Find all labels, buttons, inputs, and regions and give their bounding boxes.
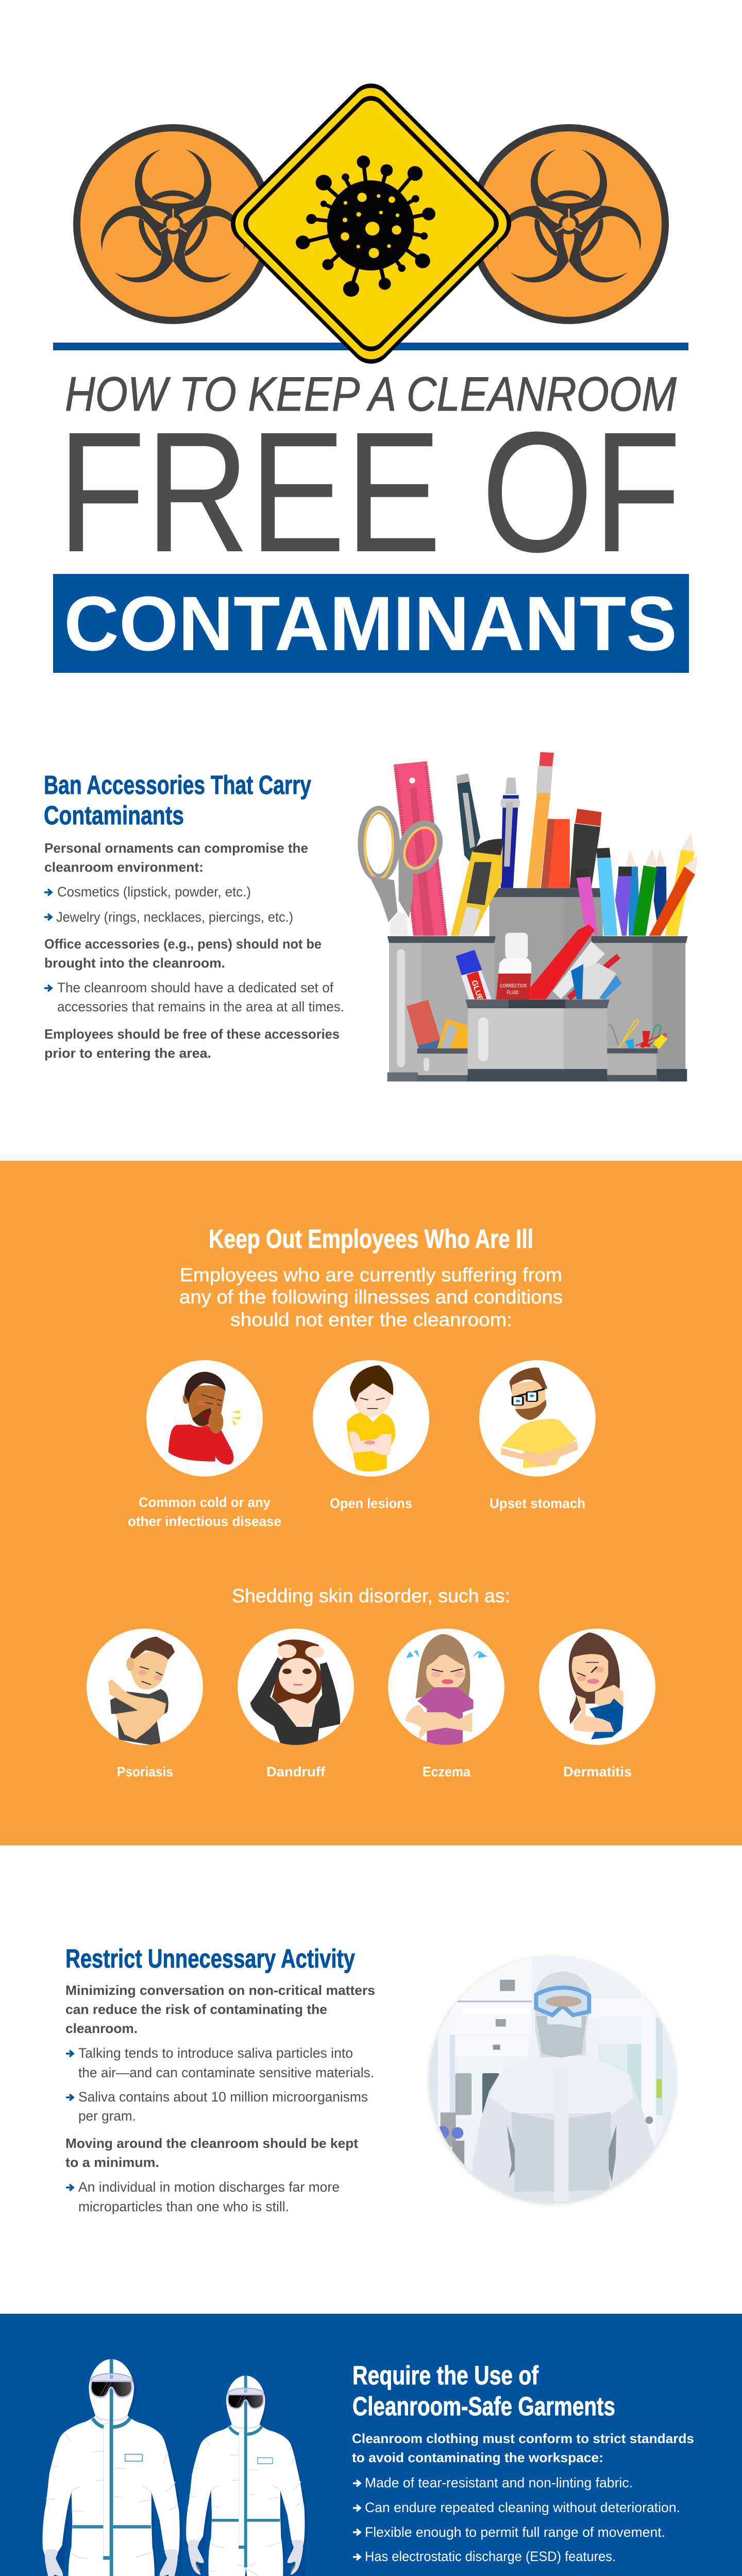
text block: accessories guidance: Personal ornaments can compromise the: [44, 840, 308, 856]
intro text: any of the following illnesses and conditions: [179, 1286, 563, 1308]
photo: worker in cleanroom suit: [428, 1955, 679, 2206]
text block: garment guidance: [352, 2431, 694, 2576]
panel: restrict unnecessary activity: [65, 1944, 679, 2214]
illustration: small figure in cleanroom suit: [186, 2376, 307, 2576]
label: dermatitis: Dermatitis: [563, 1764, 632, 1780]
text block: accessories guidance: Jewelry (rings, necklaces, piercings, etc.): [56, 909, 293, 925]
heading: Ban Accessories That Carry: [44, 770, 311, 800]
text block: activity guidance: microparticles than one who is still.: [78, 2199, 289, 2214]
text block: activity guidance: per gram.: [78, 2108, 136, 2124]
text block: activity guidance: Saliva contains about 10 million microorganisms: [78, 2089, 368, 2105]
icon: man coughing: [146, 1360, 263, 1477]
icon: man with psoriasis: [87, 1629, 203, 1747]
label: common cold: Common cold or any: [139, 1495, 271, 1510]
accent line: [53, 343, 688, 350]
text block: accessories guidance: cleanroom environment:: [44, 859, 204, 875]
intro text: should not enter the cleanroom:: [230, 1309, 512, 1330]
intro text: [179, 1264, 563, 1330]
icon: woman with dermatitis: [539, 1629, 655, 1745]
label: dandruff: Dandruff: [266, 1764, 326, 1780]
icon: yellow diamond warning sign: [223, 75, 519, 372]
icon: right biohazard badge: [473, 128, 665, 320]
icon: virus: [296, 156, 435, 297]
label: open lesions: Open lesions: [330, 1496, 412, 1511]
text block: garment guidance: Made of tear-resistant and non-linting fabric.: [365, 2475, 633, 2490]
text block: accessories guidance: Employees should be free of these accessories: [44, 1026, 340, 1042]
text block: garment guidance: to avoid contaminating the workspace:: [352, 2450, 603, 2465]
label: common cold: [128, 1495, 281, 1529]
icon: desk organizer with office accessories: FLUID: [507, 989, 519, 995]
icon: left biohazard badge: [77, 128, 269, 320]
icon: desk organizer with office accessories: [362, 752, 698, 1081]
text block: accessories guidance: accessories that remains in the area at all times.: [57, 999, 344, 1014]
text block: activity guidance: the air—and can contaminate sensitive materials.: [78, 2065, 374, 2080]
text block: garment guidance: Cleanroom clothing must conform to strict standards: [352, 2431, 694, 2446]
label: common cold: other infectious disease: [128, 1514, 281, 1529]
title: [53, 367, 689, 673]
text block: activity guidance: Moving around the cleanroom should be kept: [65, 2136, 358, 2151]
icon: person with open lesions: [313, 1360, 429, 1477]
header illustration: biohazard signs and virus warning sign: [53, 75, 688, 372]
heading: Require the Use of: [352, 2361, 539, 2390]
heading: [352, 2361, 615, 2421]
text block: activity guidance: can reduce the risk of contaminating the: [65, 2002, 327, 2017]
label: upset stomach: Upset stomach: [490, 1496, 585, 1511]
text block: activity guidance: An individual in motion discharges far more: [78, 2179, 340, 2195]
text block: activity guidance: Minimizing conversation on non-critical matters: [65, 1982, 375, 1998]
icon: desk organizer with office accessories: GLUE ST: [469, 979, 488, 1013]
text block: activity guidance: cleanroom.: [65, 2021, 138, 2036]
text block: garment guidance: Can endure repeated cleaning without deterioration.: [365, 2500, 680, 2515]
icon: man with upset stomach: [479, 1360, 596, 1477]
text block: activity guidance: to a minimum.: [65, 2155, 159, 2170]
text block: garment guidance: Has electrostatic discharge (ESD) features.: [365, 2549, 616, 2564]
panel: cleanroom-safe garments: [0, 2314, 742, 2576]
heading: Restrict Unnecessary Activity: [65, 1944, 355, 1973]
illustration: large figure in cleanroom suit: [43, 2359, 182, 2576]
text block: accessories guidance: Cosmetics (lipstick, powder, etc.): [57, 884, 251, 900]
icon: woman with eczema: [388, 1629, 504, 1745]
text block: activity guidance: [65, 1982, 375, 2214]
title banner: contaminants: CONTAMINANTS: [64, 580, 677, 667]
text block: accessories guidance: Office accessories (e.g., pens) should not be: [44, 936, 322, 952]
subheading: shedding skin disorder: Shedding skin disorder, such as:: [232, 1585, 510, 1606]
heading: [44, 770, 311, 830]
heading: Cleanroom-Safe Garments: [352, 2392, 615, 2421]
panel: keep out employees who are ill: [0, 1161, 742, 1845]
text block: accessories guidance: prior to entering the area.: [44, 1045, 211, 1061]
text block: accessories guidance: [44, 840, 344, 1061]
heading: Contaminants: [44, 801, 184, 830]
text block: accessories guidance: brought into the cleanroom.: [44, 955, 225, 971]
label: psoriasis: Psoriasis: [117, 1764, 173, 1780]
icon: woman with dandruff: [238, 1629, 354, 1745]
heading: Keep Out Employees Who Are Ill: [209, 1224, 533, 1253]
text block: garment guidance: Flexible enough to permit full range of movement.: [365, 2524, 665, 2540]
icon: desk organizer with office accessories: CORRECTION: [500, 983, 527, 989]
text block: activity guidance: Talking tends to introduce saliva particles into: [78, 2045, 353, 2061]
text block: accessories guidance: The cleanroom should have a dedicated set of: [57, 980, 333, 995]
intro text: Employees who are currently suffering from: [180, 1264, 562, 1285]
label: eczema: Eczema: [423, 1764, 471, 1780]
panel: ban accessories: [44, 752, 698, 1081]
